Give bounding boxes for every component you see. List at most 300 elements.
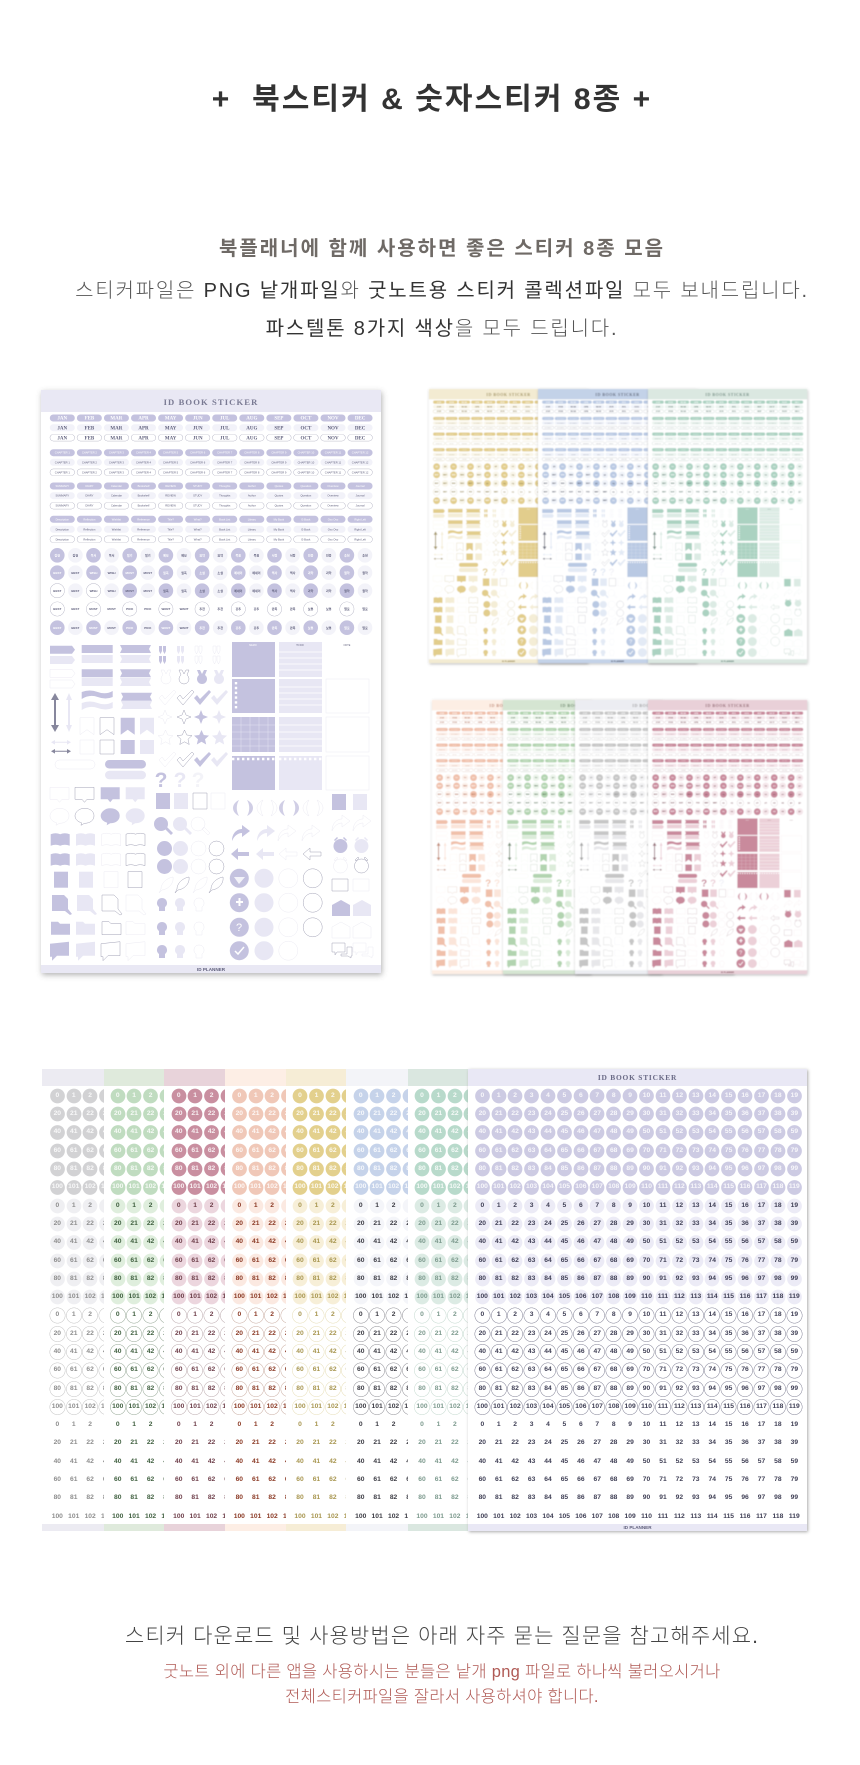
- clips, medals, checks, stars and question marks: ?: [174, 769, 186, 792]
- number stickers: rose: 42: [208, 1238, 215, 1245]
- number stickers: lavender full sheet: 53: [692, 1348, 700, 1355]
- number stickers: lavender full sheet: 87: [594, 1165, 601, 1172]
- number stickers: blue: 40: [357, 1128, 364, 1135]
- number stickers: gray: 62: [86, 1476, 94, 1483]
- number stickers: peach: 0: [237, 1421, 241, 1428]
- number stickers: mint: 80: [418, 1385, 426, 1392]
- number stickers: gray: 2: [88, 1202, 92, 1209]
- number stickers: blue: 2: [392, 1311, 395, 1318]
- number stickers: yellow: 101: [311, 1513, 322, 1520]
- number stickers: mint: 42: [451, 1348, 459, 1355]
- number stickers: lavender full sheet: 75: [725, 1257, 732, 1264]
- number stickers: mint: 21: [435, 1330, 442, 1337]
- number stickers: peach: 101: [250, 1403, 261, 1410]
- number stickers: peach: 41: [252, 1238, 259, 1245]
- number stickers: peach: 62: [268, 1257, 276, 1264]
- number stickers: lavender full sheet: 103: [526, 1293, 537, 1300]
- number stickers: rose: 82: [208, 1385, 215, 1392]
- number stickers: mint: 1: [437, 1421, 440, 1428]
- number stickers: lavender full sheet: 50: [643, 1458, 650, 1465]
- number stickers: green: 1: [132, 1092, 136, 1099]
- number stickers: yellow: [286, 1069, 346, 1531]
- number stickers: lavender full sheet: 31: [659, 1220, 667, 1227]
- right column icons: [332, 794, 373, 958]
- subtitle: 북플래너에 함께 사용하면 좋은 스티커 8종 모음: [219, 238, 665, 260]
- number stickers: blue: 60: [357, 1476, 364, 1483]
- number stickers: yellow: 21: [313, 1220, 320, 1227]
- number stickers: mint: 80: [418, 1165, 426, 1172]
- number stickers: green: 1: [132, 1421, 136, 1428]
- number stickers: green: 62: [147, 1366, 154, 1373]
- number stickers: mint: 62: [451, 1366, 459, 1373]
- number stickers: peach: 62: [268, 1147, 276, 1154]
- sheet header: ID BOOK STICKER: [164, 397, 258, 407]
- note papers: NOTE: [344, 644, 351, 647]
- number stickers: green: 60: [114, 1366, 121, 1373]
- number stickers: lavender full sheet: 108: [608, 1403, 619, 1410]
- number stickers: gray: 101: [68, 1293, 79, 1300]
- note papers: TO DO: [296, 644, 304, 647]
- number stickers: blue: 82: [390, 1385, 397, 1392]
- number stickers: lavender full sheet: 101: [493, 1183, 504, 1190]
- number stickers: lavender full sheet: 54: [708, 1128, 716, 1135]
- number stickers: green: 20: [114, 1439, 121, 1446]
- number stickers: gray: 40: [54, 1128, 61, 1135]
- number stickers: blue: 101: [372, 1183, 383, 1190]
- number stickers: lavender full sheet: 77: [758, 1476, 765, 1483]
- number stickers: lavender full sheet: 106: [575, 1513, 586, 1520]
- number stickers: lavender full sheet: 86: [577, 1385, 585, 1392]
- number stickers: mint: 101: [433, 1403, 444, 1410]
- number stickers: green: 40: [114, 1238, 121, 1245]
- number stickers: green: 101: [129, 1183, 140, 1190]
- number stickers: rose: 1: [193, 1092, 197, 1099]
- number stickers: rose: 22: [208, 1220, 215, 1227]
- number stickers: green: 80: [114, 1494, 121, 1501]
- number stickers: lavender full sheet: 104: [542, 1183, 554, 1190]
- number stickers: lavender full sheet: 39: [791, 1330, 798, 1337]
- number stickers: lavender full sheet: 98: [774, 1275, 782, 1282]
- number stickers: gray: [42, 1069, 104, 1531]
- number stickers: blue: 102: [388, 1293, 399, 1300]
- number stickers: blue: 100: [355, 1403, 366, 1410]
- number stickers: gray: 60: [54, 1476, 61, 1483]
- number stickers: yellow: 100: [294, 1183, 306, 1190]
- number stickers: blue: 80: [357, 1494, 364, 1501]
- number stickers: lavender full sheet: 47: [594, 1128, 601, 1135]
- sheet footer: [41, 965, 381, 973]
- number stickers: lavender full sheet: 117: [756, 1293, 767, 1300]
- number stickers: mint: 81: [435, 1275, 442, 1282]
- number stickers: lavender full sheet: 63: [528, 1476, 535, 1483]
- number stickers: mint: 81: [435, 1494, 442, 1501]
- number stickers: green: 22: [147, 1439, 154, 1446]
- number stickers: lavender full sheet: 66: [577, 1257, 585, 1264]
- number stickers: peach: 2: [270, 1202, 274, 1209]
- number stickers: yellow: 82: [329, 1385, 337, 1392]
- number stickers: lavender full sheet: 28: [610, 1439, 617, 1446]
- number stickers: lavender full sheet: 105: [559, 1513, 570, 1520]
- number stickers: lavender full sheet: 101: [493, 1403, 504, 1410]
- number stickers: blue: 60: [357, 1147, 364, 1154]
- number stickers: lavender full sheet: 89: [626, 1165, 634, 1172]
- number stickers: mint: 101: [433, 1513, 444, 1520]
- number stickers: lavender full sheet: 49: [626, 1458, 634, 1465]
- number stickers: lavender full sheet: 37: [758, 1330, 765, 1337]
- number stickers: gray: 1: [72, 1202, 76, 1209]
- number stickers: lavender full sheet: 35: [725, 1330, 732, 1337]
- number stickers: lavender full sheet: 59: [791, 1348, 798, 1355]
- number stickers: lavender full sheet: 64: [544, 1366, 552, 1373]
- number stickers: lavender full sheet: 63: [528, 1366, 535, 1373]
- number stickers: mint: 100: [416, 1513, 428, 1520]
- number stickers: lavender full sheet: 84: [544, 1494, 552, 1501]
- number stickers: green: 101: [129, 1403, 140, 1410]
- number stickers: green: 62: [147, 1257, 154, 1264]
- number stickers: gray: 62: [86, 1147, 94, 1154]
- number stickers: lavender full sheet: 105: [559, 1293, 570, 1300]
- number stickers: lavender full sheet: 71: [659, 1476, 667, 1483]
- word tabs: [53, 484, 372, 508]
- number stickers: lavender full sheet: 11: [659, 1421, 666, 1428]
- number stickers: peach: 102: [267, 1403, 278, 1410]
- number stickers: peach: 41: [252, 1458, 259, 1465]
- number stickers: lavender full sheet: 40: [479, 1238, 486, 1245]
- number stickers: lavender full sheet: 97: [758, 1165, 765, 1172]
- number stickers: yellow: 81: [313, 1275, 320, 1282]
- number stickers: yellow: 42: [329, 1238, 337, 1245]
- number stickers: lavender full sheet: 105: [559, 1403, 570, 1410]
- number stickers: lavender full sheet: 44: [544, 1128, 552, 1135]
- number stickers: lavender full sheet: 63: [528, 1257, 535, 1264]
- number stickers: yellow: 62: [329, 1257, 337, 1264]
- number stickers: lavender full sheet: 65: [561, 1366, 568, 1373]
- number stickers: green: 100: [112, 1183, 123, 1190]
- number stickers: lavender full sheet: 56: [741, 1458, 749, 1465]
- number stickers: mint: 61: [435, 1366, 442, 1373]
- number stickers: peach: 81: [252, 1165, 259, 1172]
- number stickers: lavender full sheet: 3: [530, 1092, 533, 1099]
- number stickers: yellow: 100: [294, 1293, 306, 1300]
- number stickers: blue: 41: [373, 1238, 381, 1245]
- number stickers: gray: 42: [86, 1348, 94, 1355]
- number stickers: gray: 0: [55, 1092, 59, 1099]
- number stickers: yellow: 100: [294, 1513, 306, 1520]
- number stickers: lavender full sheet: 64: [544, 1476, 552, 1483]
- number stickers: lavender full sheet: 15: [725, 1311, 732, 1318]
- number stickers: peach: 42: [268, 1458, 276, 1465]
- number stickers: yellow: 21: [313, 1110, 320, 1117]
- number stickers: lavender full sheet: 104: [542, 1293, 554, 1300]
- number stickers: rose: 40: [175, 1458, 182, 1465]
- number stickers: lavender full sheet: 52: [676, 1348, 683, 1355]
- number stickers: gray: 42: [86, 1458, 94, 1465]
- number stickers: green: 1: [132, 1311, 136, 1318]
- number stickers: peach: 60: [236, 1147, 243, 1154]
- number stickers: lavender full sheet: 108: [608, 1293, 619, 1300]
- number stickers: lavender full sheet: 79: [791, 1366, 798, 1373]
- number stickers: peach: 61: [252, 1147, 259, 1154]
- number stickers: rose: 40: [175, 1128, 182, 1135]
- number stickers: lavender full sheet: 21: [495, 1439, 502, 1446]
- number stickers: lavender full sheet: 54: [708, 1348, 716, 1355]
- number stickers: mint: 102: [449, 1403, 460, 1410]
- number stickers: lavender full sheet: 44: [544, 1238, 552, 1245]
- number stickers: lavender full sheet: 108: [608, 1183, 619, 1190]
- number stickers: yellow: 20: [296, 1220, 304, 1227]
- number stickers: lavender full sheet: 23: [528, 1110, 535, 1117]
- number stickers: peach: 0: [237, 1311, 241, 1318]
- number stickers: lavender full sheet: 68: [610, 1476, 617, 1483]
- number stickers: lavender full sheet: 70: [643, 1476, 650, 1483]
- number stickers: lavender full sheet: 96: [741, 1385, 749, 1392]
- number stickers: lavender full sheet: 114: [707, 1403, 718, 1410]
- number stickers: lavender full sheet: 36: [741, 1220, 749, 1227]
- number stickers: blue: 61: [373, 1476, 381, 1483]
- number stickers: lavender full sheet: 101: [493, 1513, 504, 1520]
- number stickers: yellow: 101: [311, 1183, 322, 1190]
- number stickers: peach: 81: [252, 1385, 259, 1392]
- number stickers: green: 22: [147, 1330, 154, 1337]
- number stickers: lavender full sheet: 5: [563, 1092, 566, 1099]
- number stickers: lavender full sheet: 31: [659, 1110, 667, 1117]
- number stickers: yellow: 41: [313, 1458, 320, 1465]
- number stickers: lavender full sheet: 118: [772, 1293, 783, 1300]
- number stickers: rose: 80: [175, 1494, 182, 1501]
- number stickers: gray: 20: [54, 1220, 61, 1227]
- number stickers: lavender full sheet: 83: [528, 1275, 535, 1282]
- number stickers: lavender full sheet: 47: [594, 1458, 601, 1465]
- number stickers: green: 82: [147, 1385, 154, 1392]
- number stickers: lavender full sheet: 100: [477, 1183, 488, 1190]
- number stickers: lavender full sheet: 42: [511, 1238, 519, 1245]
- number stickers: lavender full sheet: 19: [791, 1202, 798, 1209]
- number stickers: lavender full sheet: 91: [659, 1494, 667, 1501]
- number stickers: lavender full sheet: 57: [758, 1238, 765, 1245]
- sheet: green: [503, 700, 663, 975]
- number stickers: lavender full sheet: 82: [511, 1275, 519, 1282]
- number stickers: mint: 41: [435, 1238, 442, 1245]
- number stickers: blue: 82: [390, 1494, 397, 1501]
- number stickers: rose: 80: [175, 1275, 182, 1282]
- number stickers: lavender full sheet: 113: [690, 1403, 701, 1410]
- number stickers: lavender full sheet: 4: [546, 1202, 550, 1209]
- number stickers: lavender full sheet: 25: [561, 1330, 568, 1337]
- number stickers: lavender full sheet: 3: [530, 1202, 533, 1209]
- number stickers: peach: 22: [268, 1110, 276, 1117]
- number stickers: rose: [164, 1069, 225, 1531]
- number stickers: lavender full sheet: 9: [628, 1202, 632, 1209]
- number stickers: gray: 100: [52, 1183, 63, 1190]
- number stickers: lavender full sheet: 18: [774, 1092, 782, 1099]
- number stickers: lavender full sheet: 45: [561, 1458, 568, 1465]
- number stickers: lavender full sheet: 41: [495, 1458, 502, 1465]
- number stickers: lavender full sheet: 79: [791, 1257, 798, 1264]
- number stickers: lavender full sheet: 115: [723, 1513, 734, 1520]
- number stickers: blue: 22: [390, 1330, 397, 1337]
- number stickers: rose: 22: [208, 1110, 215, 1117]
- number stickers: peach: 80: [236, 1385, 243, 1392]
- number stickers: peach: 42: [268, 1128, 276, 1135]
- number stickers: mint: 61: [435, 1147, 442, 1154]
- number stickers: yellow: 80: [296, 1275, 304, 1282]
- number stickers: green: 1: [132, 1202, 136, 1209]
- number stickers: lavender full sheet: 116: [740, 1513, 750, 1520]
- number stickers: green: 40: [114, 1348, 121, 1355]
- number stickers: lavender full sheet: 85: [561, 1385, 568, 1392]
- number stickers: mint: 60: [418, 1476, 426, 1483]
- number stickers: green: 102: [145, 1513, 156, 1520]
- number stickers: yellow: 22: [329, 1220, 337, 1227]
- number stickers: lavender full sheet: 104: [542, 1513, 554, 1520]
- number stickers: mint: 80: [418, 1494, 426, 1501]
- number stickers: blue: 42: [390, 1238, 397, 1245]
- number stickers: lavender full sheet: 15: [725, 1202, 732, 1209]
- number stickers: peach: 21: [252, 1330, 259, 1337]
- number stickers: mint: 1: [437, 1092, 440, 1099]
- number stickers: mint: 2: [453, 1202, 457, 1209]
- number stickers: lavender full sheet: 6: [579, 1202, 583, 1209]
- number stickers: lavender full sheet: 16: [741, 1421, 749, 1428]
- number stickers: lavender full sheet: 9: [628, 1092, 632, 1099]
- number stickers: lavender full sheet: 80: [479, 1385, 486, 1392]
- number stickers: lavender full sheet: 84: [544, 1275, 552, 1282]
- number stickers: blue: 21: [373, 1330, 381, 1337]
- number stickers: lavender full sheet: 44: [544, 1458, 552, 1465]
- clips, medals, checks, stars and question marks: [154, 646, 228, 958]
- number stickers: blue: 82: [390, 1275, 397, 1282]
- number stickers: lavender full sheet: 61: [495, 1476, 502, 1483]
- number stickers: peach: 102: [267, 1293, 278, 1300]
- number stickers: lavender full sheet: 56: [741, 1128, 749, 1135]
- number stickers: green: 2: [149, 1092, 152, 1099]
- number stickers: rose: 100: [173, 1513, 184, 1520]
- number stickers: lavender full sheet: 48: [610, 1238, 617, 1245]
- number stickers: green: 41: [130, 1458, 138, 1465]
- number stickers: rose: 101: [190, 1403, 201, 1410]
- number stickers: yellow: 1: [315, 1421, 318, 1428]
- number stickers: yellow: 0: [298, 1421, 302, 1428]
- number stickers: lavender full sheet: 50: [643, 1128, 650, 1135]
- number stickers: gray: 80: [54, 1275, 61, 1282]
- number stickers: mint: 60: [418, 1366, 426, 1373]
- number stickers: lavender full sheet: 79: [791, 1476, 798, 1483]
- number stickers: lavender full sheet: 96: [741, 1494, 749, 1501]
- number stickers: lavender full sheet: 97: [758, 1385, 765, 1392]
- number stickers: lavender full sheet: 1: [497, 1202, 501, 1209]
- number stickers: gray: 62: [86, 1366, 94, 1373]
- number stickers: gray: 101: [68, 1403, 79, 1410]
- number stickers: lavender full sheet: 52: [676, 1238, 683, 1245]
- number stickers: yellow: 61: [313, 1257, 320, 1264]
- number stickers: lavender full sheet: 99: [791, 1494, 798, 1501]
- number stickers: blue: 22: [390, 1439, 397, 1446]
- number stickers: blue: 82: [390, 1165, 397, 1172]
- number stickers: green: 81: [130, 1494, 138, 1501]
- number stickers: blue: 61: [373, 1366, 381, 1373]
- number stickers: gray: 20: [54, 1110, 61, 1117]
- number stickers: lavender full sheet: 11: [659, 1311, 666, 1318]
- number stickers: lavender full sheet: 94: [708, 1385, 716, 1392]
- number stickers: gray: 62: [86, 1257, 94, 1264]
- list tabs: [53, 517, 372, 541]
- number stickers: lavender full sheet: 52: [676, 1128, 683, 1135]
- number stickers: lavender full sheet: 20: [479, 1439, 486, 1446]
- number stickers: green: 100: [112, 1403, 123, 1410]
- number stickers: mint: 21: [435, 1110, 442, 1117]
- number stickers: peach: 62: [268, 1476, 276, 1483]
- number stickers: lavender full sheet: 1: [497, 1421, 501, 1428]
- number stickers: mint: 41: [435, 1458, 442, 1465]
- number stickers: green: 41: [130, 1238, 138, 1245]
- number stickers: lavender full sheet: 62: [511, 1366, 519, 1373]
- number stickers: lavender full sheet: 17: [758, 1311, 765, 1318]
- number stickers: green: 2: [149, 1311, 152, 1318]
- number stickers: yellow: 1: [315, 1311, 318, 1318]
- number stickers: blue: 0: [359, 1092, 363, 1099]
- number stickers: gray: 2: [88, 1092, 92, 1099]
- number stickers: mint: 2: [453, 1421, 457, 1428]
- number stickers: lavender full sheet: 117: [756, 1183, 767, 1190]
- number stickers: lavender full sheet: 40: [479, 1348, 486, 1355]
- number stickers: lavender full sheet: 0: [480, 1311, 484, 1318]
- number stickers: lavender full sheet: 17: [758, 1421, 765, 1428]
- number stickers: lavender full sheet: 35: [725, 1220, 732, 1227]
- number stickers: lavender full sheet: 115: [723, 1293, 734, 1300]
- number stickers: yellow: 60: [296, 1147, 304, 1154]
- number stickers: green: 41: [130, 1128, 138, 1135]
- number stickers: lavender full sheet: 103: [526, 1513, 537, 1520]
- number stickers: lavender full sheet: 39: [791, 1439, 798, 1446]
- number stickers: peach: 40: [236, 1348, 243, 1355]
- number stickers: rose: 102: [206, 1403, 217, 1410]
- number stickers: lavender full sheet: 111: [658, 1403, 668, 1410]
- number stickers: lavender full sheet: 38: [774, 1110, 782, 1117]
- number stickers: lavender full sheet: 37: [758, 1220, 765, 1227]
- sheet footer: ID PLANNER: [197, 967, 226, 972]
- number stickers: lavender full sheet: 27: [594, 1220, 601, 1227]
- number stickers: peach: 20: [236, 1110, 243, 1117]
- number stickers: lavender full sheet: 22: [511, 1110, 519, 1117]
- number stickers: rose: 2: [210, 1421, 213, 1428]
- number stickers: lavender full sheet: 67: [594, 1147, 601, 1154]
- number stickers: lavender full sheet: 57: [758, 1348, 765, 1355]
- number stickers: lavender full sheet: 102: [510, 1513, 521, 1520]
- number stickers: lavender full sheet: 12: [676, 1092, 683, 1099]
- number stickers: lavender full sheet: 96: [741, 1275, 749, 1282]
- number stickers: lavender full sheet: 23: [528, 1439, 535, 1446]
- number stickers: yellow: 2: [331, 1092, 335, 1099]
- number stickers: lavender full sheet: 55: [725, 1128, 732, 1135]
- number stickers: lavender full sheet: 31: [659, 1330, 667, 1337]
- number stickers: lavender full sheet: 15: [725, 1092, 732, 1099]
- number stickers: gray: 82: [86, 1275, 94, 1282]
- round word stickers: [53, 552, 371, 630]
- number stickers: peach: 60: [236, 1257, 243, 1264]
- number stickers: lavender full sheet: 38: [774, 1330, 782, 1337]
- number stickers: mint: 80: [418, 1275, 426, 1282]
- number stickers: lavender full sheet: 27: [594, 1330, 601, 1337]
- sheet header: [41, 390, 381, 412]
- number stickers: lavender full sheet: 2: [513, 1202, 517, 1209]
- number stickers: green: 61: [130, 1257, 138, 1264]
- number stickers: lavender full sheet: 12: [676, 1421, 683, 1428]
- number stickers: green: 101: [129, 1513, 140, 1520]
- number stickers: lavender full sheet: 6: [579, 1311, 583, 1318]
- number stickers: blue: 21: [373, 1110, 381, 1117]
- number stickers: mint: 2: [453, 1311, 457, 1318]
- number stickers: peach: 21: [252, 1110, 259, 1117]
